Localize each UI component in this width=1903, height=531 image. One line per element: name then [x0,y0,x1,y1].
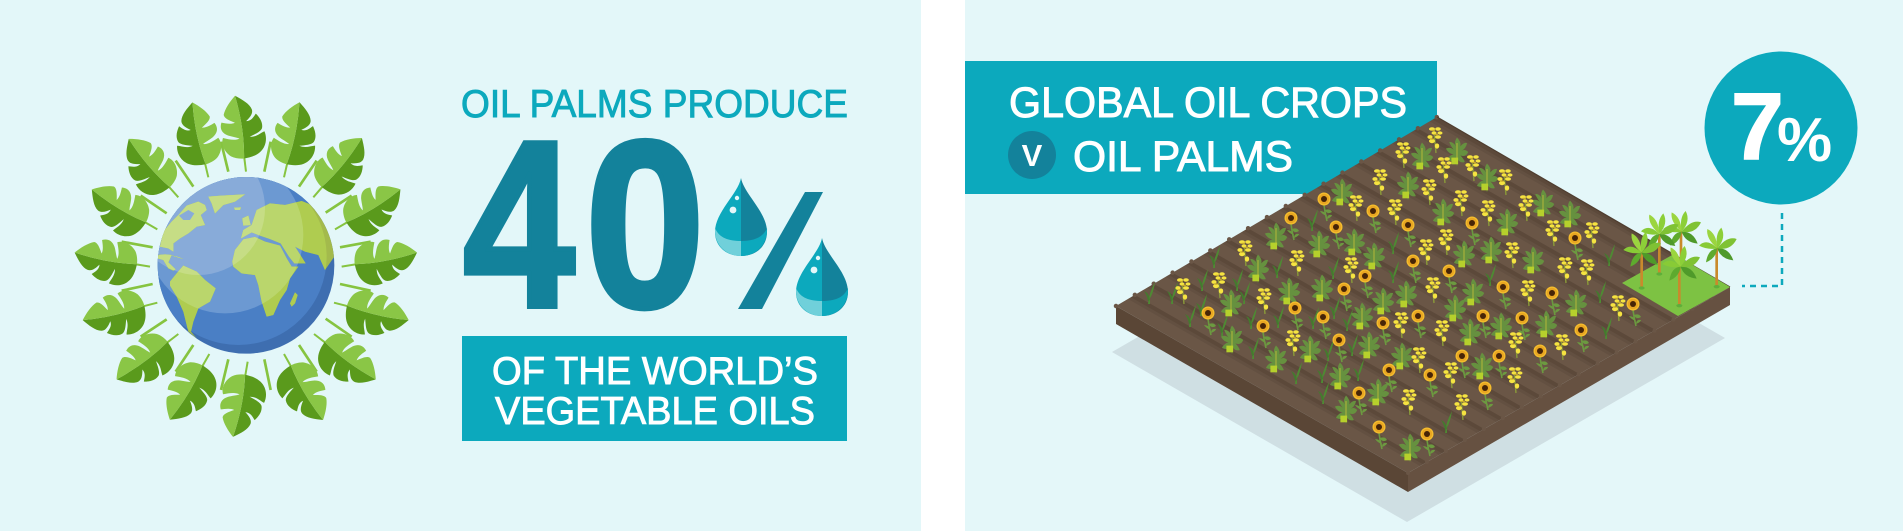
chart: isometric field of global oil crops [1112,117,1737,522]
rays between leaves [122,142,371,390]
icon: ring of leaves [70,92,422,442]
big number: 40: 4 [463,92,575,358]
panel: right background [965,0,1903,531]
heading: oil palms produce: OIL PALMS PRODUCE [461,83,848,126]
field right side face [1408,287,1730,492]
icon: percent sign built from a slash and two oil drops [715,178,848,316]
icon: v badge [1008,131,1056,179]
callout: 7 percent circle [1704,52,1858,204]
field shadow [1112,168,1725,522]
oil palm plot [1622,211,1737,316]
green plot [1622,254,1730,316]
banner: of the world's vegetable oils [462,336,847,441]
banner: global oil crops v oil palms [965,61,1437,194]
arrow: dashed connector from circle to palm plot [1742,213,1782,286]
big number: 40 [463,92,705,358]
icon: upper oil drop [715,178,767,256]
banner: of the world's vegetable oils: VEGETABLE OILS [495,390,815,433]
banner: global oil crops v oil palms: OIL PALMS [1073,133,1293,181]
field left side face [1116,306,1408,492]
bush plants [1220,137,1587,463]
field top surface with furrows [1116,117,1730,473]
oil palm trees [1623,211,1737,307]
sunflower plants [1202,192,1641,456]
banner: global oil crops v oil palms: GLOBAL OIL CROPS [1009,79,1407,127]
icon: v badge: V [1022,138,1043,173]
panel: left background [0,0,921,531]
banner: of the world's vegetable oils: OF THE WORLD’S [492,350,818,393]
sprout plants [1144,209,1615,433]
icon: lower oil drop [796,238,848,316]
callout: 7 percent circle: 7 [1731,74,1784,180]
big number: 40: 0 [585,92,705,358]
rapeseed plants [1175,127,1626,420]
icon: globe surrounded by leaves [70,92,422,442]
callout: 7 percent circle: % [1777,106,1832,175]
icon: earth globe [158,177,334,354]
